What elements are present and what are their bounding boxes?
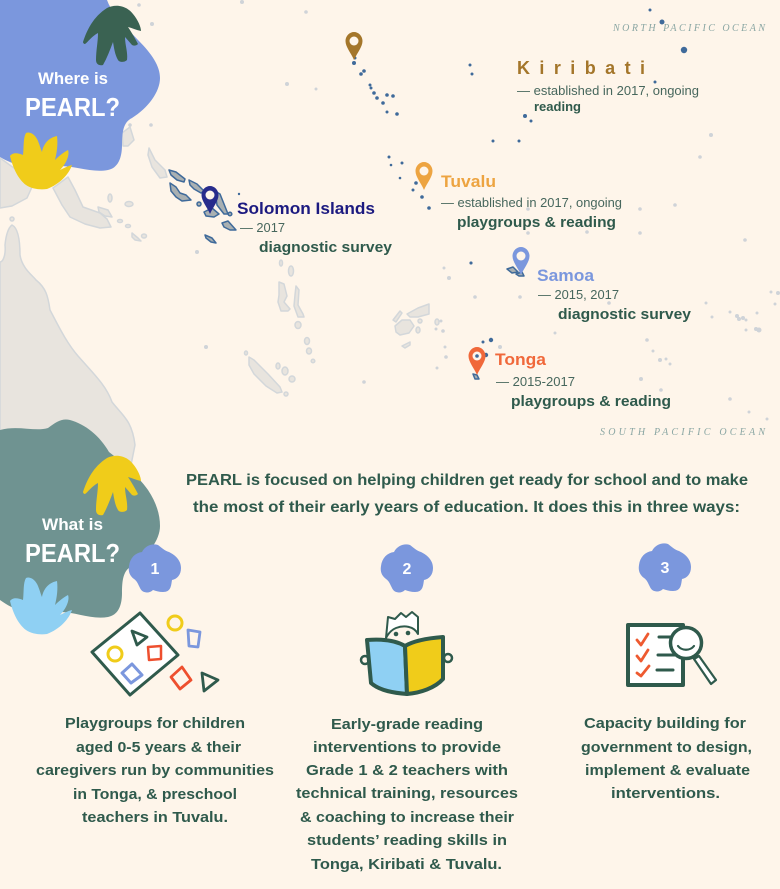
dates: — 2015-2017 (496, 374, 575, 389)
label: Solomon Islands (237, 199, 392, 256)
ocean label: north: NORTH PACIFIC OCEAN (612, 23, 766, 34)
pin: Samoa (512, 247, 530, 275)
label: Kiribati (517, 58, 699, 114)
blue blob (0, 0, 160, 171)
country name: Tonga (495, 350, 547, 369)
teal blob (0, 419, 160, 618)
label: Samoa (537, 266, 691, 323)
heading large: PEARL? (25, 538, 120, 568)
dates: — 2017 (240, 220, 285, 235)
Solomon Islands map shapes (169, 170, 236, 243)
intro text: the most of their early years of education. It does this in three ways: (193, 499, 740, 516)
dates: — 2015, 2017 (538, 287, 619, 302)
map: grey land masses (0, 127, 439, 470)
step 3 badge (639, 543, 691, 591)
activity: reading (534, 99, 581, 114)
label: Tuvalu (441, 172, 622, 231)
step 1 badge: 1 (151, 561, 160, 578)
pin: Tuvalu (416, 162, 432, 190)
yellow leaf (10, 133, 72, 189)
panel: What is PEARL (0, 419, 160, 634)
pin: Kiribati (346, 32, 362, 60)
step 2 description: Early-grade reading (331, 716, 483, 733)
light blue leaf (10, 578, 72, 634)
step 2 description: interventions to provide (313, 739, 501, 756)
label: Tonga (495, 350, 671, 410)
step 3 description: interventions. (611, 785, 720, 802)
step 3 badge: 3 (661, 560, 670, 577)
heading: Where is (38, 69, 108, 88)
step 2 badge: 2 (403, 561, 412, 578)
step 2 description: technical training, resources (296, 785, 518, 802)
heading: What is (42, 515, 103, 534)
Tonga map shapes (473, 374, 479, 379)
intro text: PEARL is focused on helping children get ready for school and to make (186, 472, 748, 489)
step 1 description: Playgroups for children (65, 715, 245, 732)
ocean label: south: SOUTH PACIFIC OCEAN (600, 427, 766, 438)
step 3 description: implement & evaluate (585, 762, 750, 779)
activity: diagnostic survey (259, 240, 392, 256)
Samoa map shapes (507, 267, 524, 276)
country name: Samoa (537, 266, 595, 285)
activity: diagnostic survey (558, 307, 691, 323)
dates: — established in 2017, ongoing (517, 83, 699, 98)
step 2 badge (381, 544, 433, 592)
step 1 description: in Tonga, & preschool (73, 786, 237, 803)
country name: Tuvalu (441, 172, 496, 191)
heading large: PEARL? (25, 92, 120, 122)
activity: playgroups & reading (457, 215, 616, 231)
New Caledonia (249, 357, 282, 393)
pin: Solomon Islands (202, 186, 218, 214)
step 1 description: aged 0-5 years & their (76, 739, 241, 756)
Papua New Guinea (0, 158, 111, 228)
dates: — established in 2017, ongoing (441, 195, 622, 210)
step 3 description: Capacity building for (584, 715, 746, 732)
activity: playgroups & reading (511, 394, 671, 410)
step 1 description: caregivers run by communities (36, 762, 274, 779)
icon: play card with shapes (92, 613, 218, 695)
step 3 description: government to design, (581, 739, 752, 756)
step 2 description: & coaching to increase their (300, 809, 514, 826)
Vanuatu (278, 282, 290, 311)
pin: Tonga (468, 347, 486, 375)
step 2 description: Tonga, Kiribati & Tuvalu. (311, 856, 502, 873)
Fiji (395, 320, 414, 335)
panel: Where is PEARL (0, 0, 160, 189)
green hand (83, 6, 141, 65)
country name: Kiribati (517, 58, 645, 78)
country name: Solomon Islands (237, 199, 375, 218)
step 2 description: students’ reading skills in (307, 832, 507, 849)
map: Pacific project islands (238, 8, 687, 357)
step 2 description (296, 716, 518, 873)
Australia (0, 225, 135, 470)
Papua east islands (122, 127, 167, 178)
step 1 badge (129, 544, 181, 592)
icon: child reading a book (361, 612, 452, 694)
intro text (186, 472, 748, 516)
icon: checklist and magnifier (628, 625, 716, 685)
step 2 description: Grade 1 & 2 teachers with (306, 762, 508, 779)
yellow hand (83, 456, 141, 515)
step 1 description (36, 715, 274, 826)
map: grey small islands (128, 0, 780, 420)
step 3 description (581, 715, 752, 802)
step 1 description: teachers in Tuvalu. (82, 809, 228, 826)
